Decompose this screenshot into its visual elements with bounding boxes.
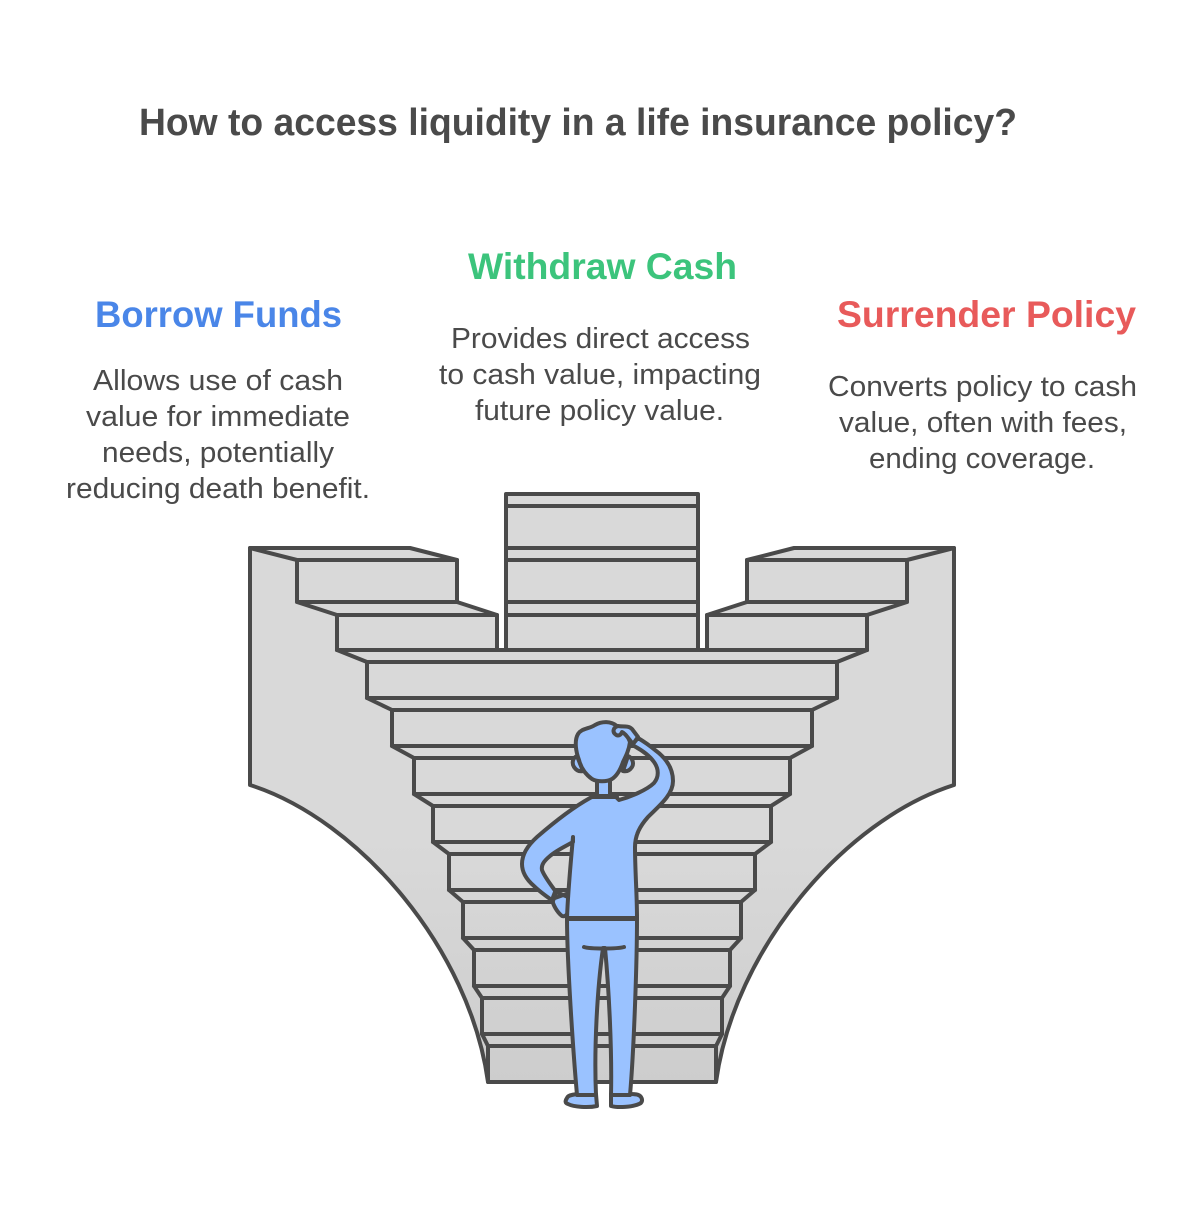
icon: legs [567, 919, 637, 1095]
left upper steps [250, 548, 497, 650]
text block: surrender policy description [828, 371, 1137, 475]
text block: borrow funds description: Allows use of cash [93, 365, 343, 397]
heading: withdraw cash: Withdraw Cash [468, 246, 737, 287]
icon: left ear [573, 756, 583, 771]
text block: borrow funds description: value for immediate [86, 401, 350, 433]
text block: surrender policy description: Converts policy to cash [828, 371, 1137, 403]
text block: borrow funds description: needs, potentially [102, 437, 335, 469]
title: How to access liquidity in a life insurance policy? [139, 102, 1017, 144]
panel: withdraw cash [439, 246, 761, 427]
text block: withdraw cash description: to cash value, impacting [439, 359, 761, 391]
icon: hand on hip [552, 893, 569, 916]
text block: withdraw cash description [439, 323, 761, 427]
icon: right ear [623, 756, 633, 771]
center staircase column [506, 494, 698, 650]
right upper steps [707, 548, 954, 650]
text block: surrender policy description: ending coverage. [869, 443, 1095, 475]
text block: borrow funds description: reducing death benefit. [66, 473, 370, 505]
icon: raised hand [614, 726, 638, 744]
icon: hip cuff line [552, 892, 568, 900]
text block: surrender policy description: value, often with fees, [839, 407, 1127, 439]
text block: withdraw cash description: Provides direct access [451, 323, 750, 355]
icon: neck [597, 778, 610, 796]
icon: collar line [592, 795, 617, 799]
icon: right foot [611, 1094, 642, 1107]
central steps [337, 650, 867, 1082]
icon: head [576, 722, 630, 781]
icon: seat line [584, 947, 624, 948]
staircase silhouette [250, 548, 954, 1082]
panel: borrow funds [66, 294, 370, 505]
heading: borrow funds: Borrow Funds [95, 294, 342, 335]
panel: surrender policy [828, 294, 1137, 475]
heading: surrender policy: Surrender Policy [837, 294, 1136, 335]
icon: torso and arms [522, 738, 673, 918]
icon: left foot [566, 1094, 597, 1107]
text block: withdraw cash description: future policy value. [475, 395, 724, 427]
text block: borrow funds description [66, 365, 370, 505]
person scratching head [522, 722, 673, 1107]
staircase illustration [250, 494, 954, 1082]
